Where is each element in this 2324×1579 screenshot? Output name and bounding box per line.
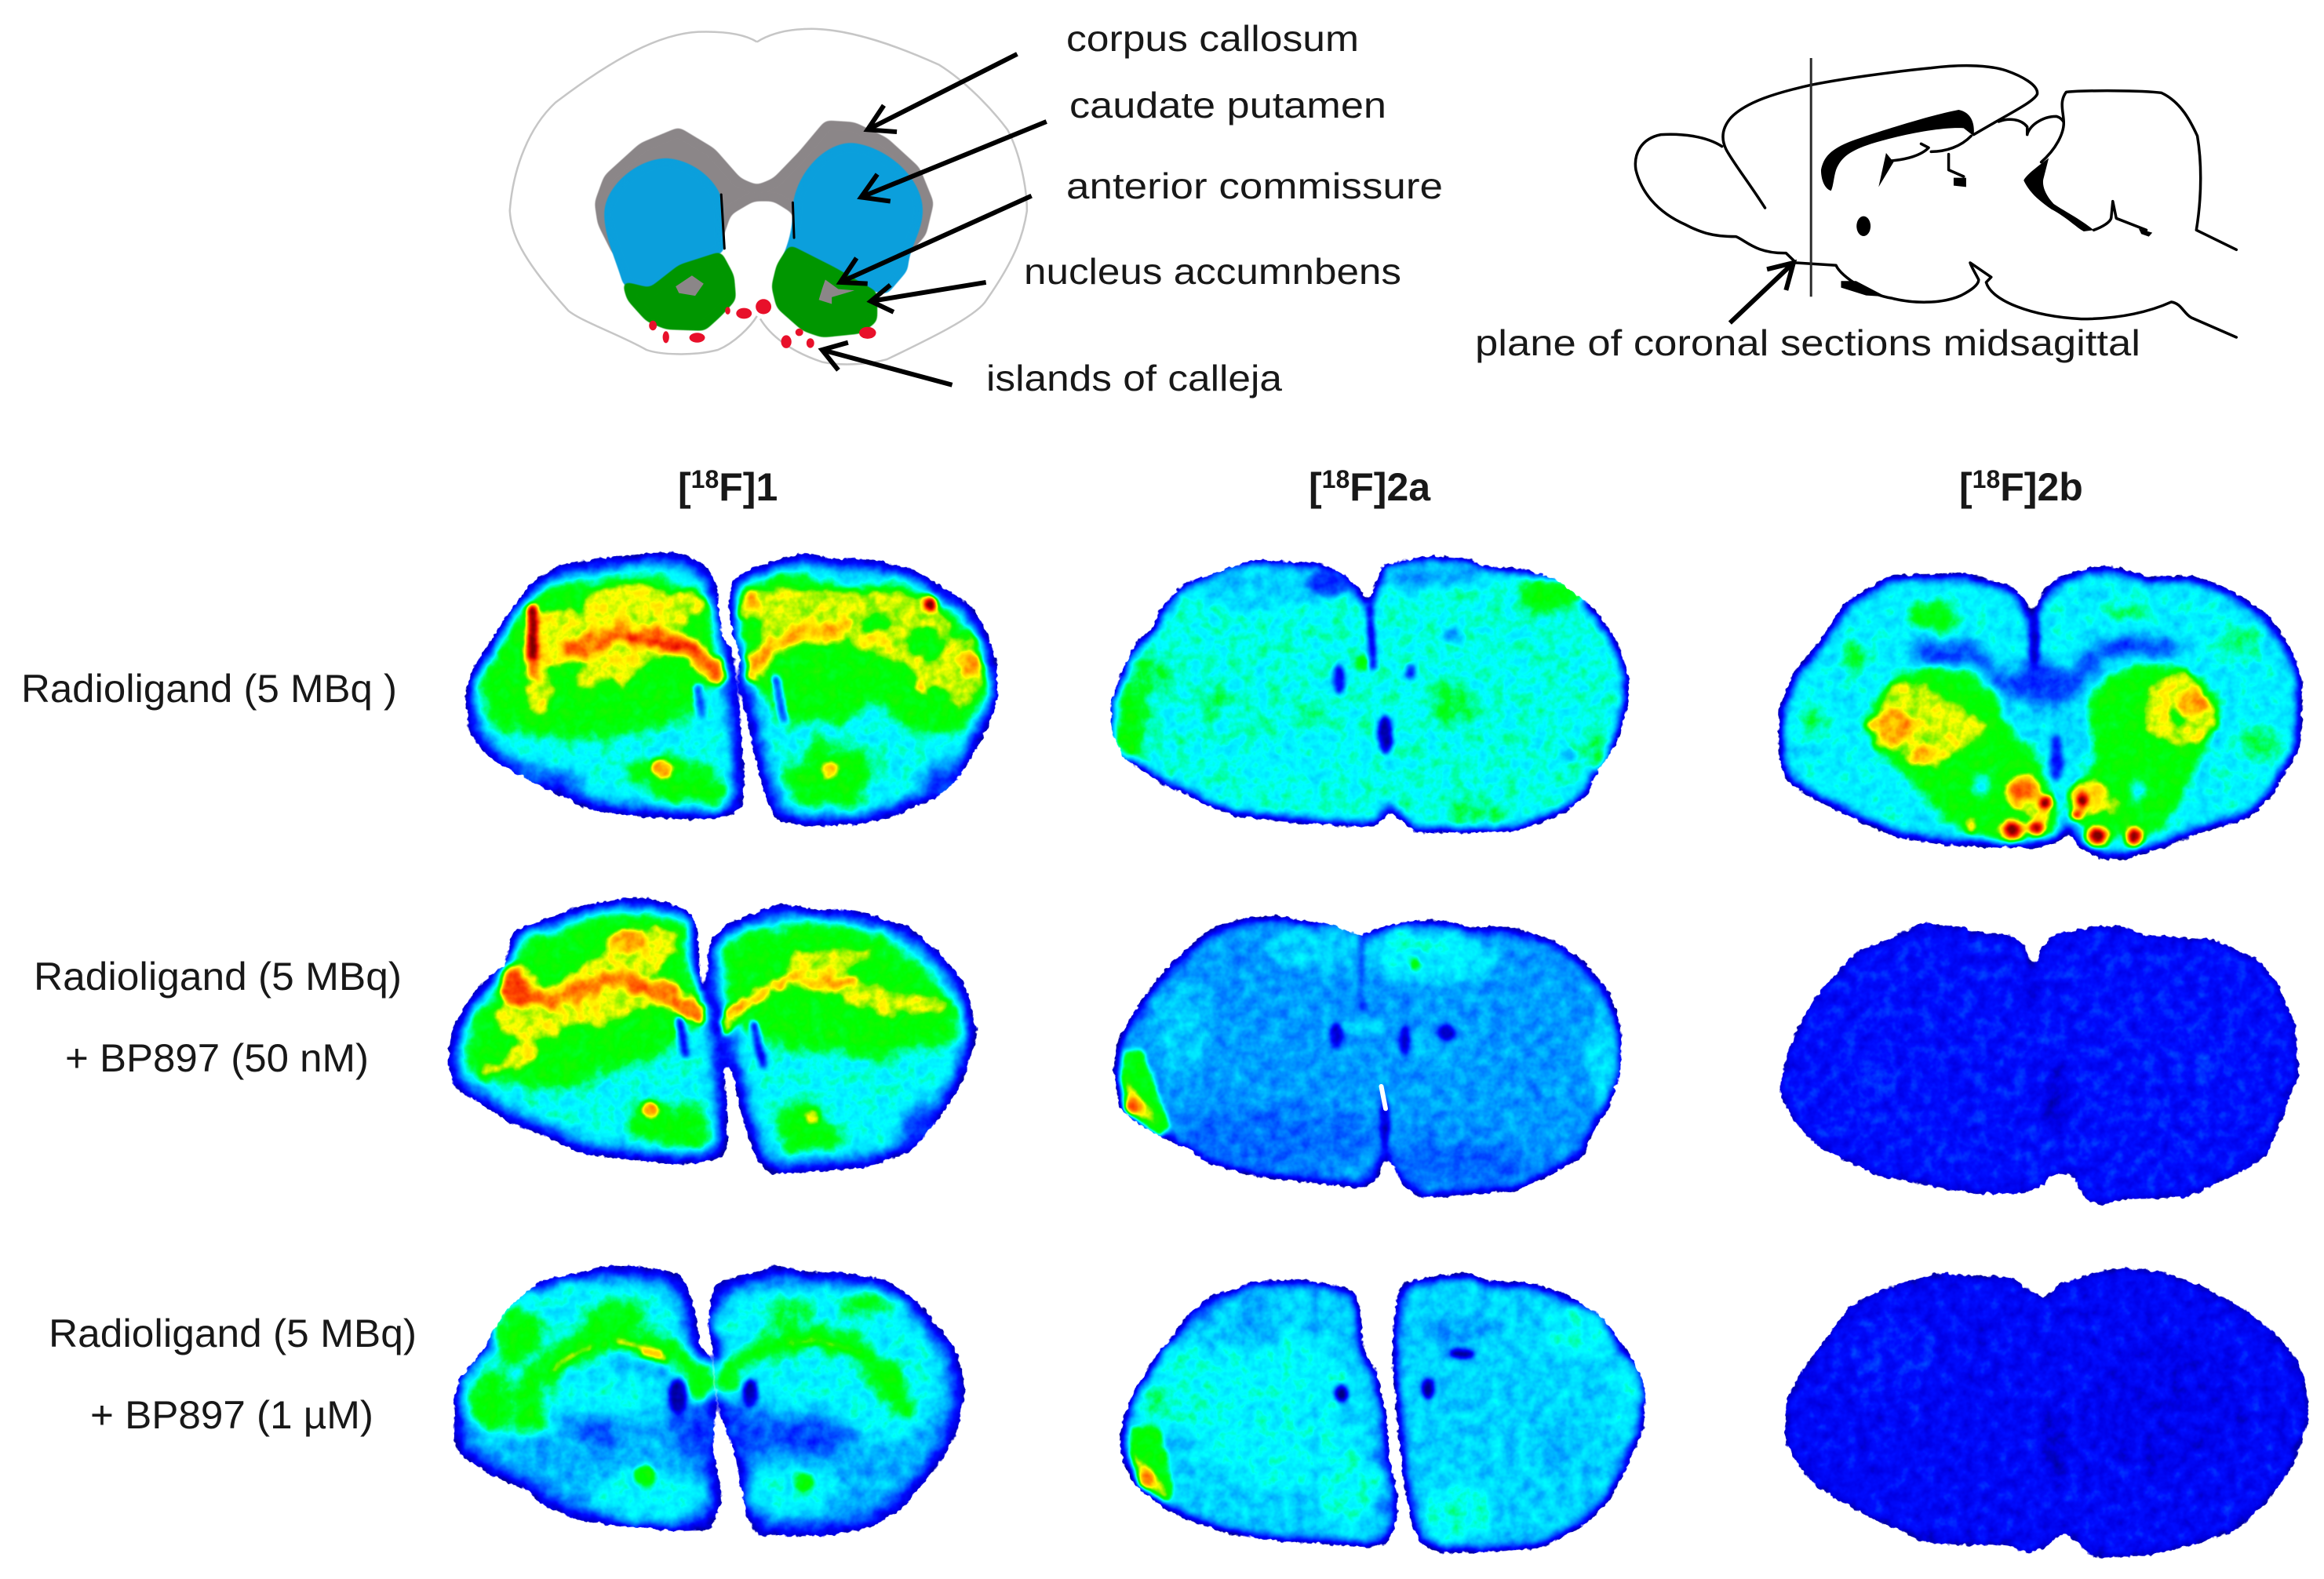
plane of section line <box>1810 58 1812 297</box>
column heading: [18F]2b: 18 <box>1972 465 2000 493</box>
label: caudate putamen: caudate putamen <box>1069 85 1386 126</box>
arrow: anterior commissure <box>840 196 1032 284</box>
label: islands of calleja: islands of calleja <box>986 358 1282 398</box>
label: corpus callosum: corpus callosum <box>1066 18 1359 59</box>
label: nucleus accumnbens: nucleus accumnbens <box>1024 251 1401 292</box>
column heading: [18F]2a: F]2a <box>1350 465 1431 509</box>
heatmap: [18F]2b radioligand <box>1776 565 2304 861</box>
ventricle edges <box>721 195 794 249</box>
anterior commissure regions <box>676 275 854 304</box>
arrow: caudate putamen <box>861 122 1047 202</box>
heatmap: [18F]2a radioligand <box>1109 554 1630 835</box>
nucleus accumbens regions <box>621 245 877 338</box>
heatmap: [18F]1 with BP897 50 nM <box>447 897 978 1175</box>
arrow: plane of coronal sections <box>1730 263 1794 323</box>
row label: radioligand 5 MBq: Radioligand (5 MBq ) <box>21 667 397 711</box>
caudate putamen regions <box>604 143 923 294</box>
heatmap: [18F]2a with BP897 1 µM <box>1119 1272 1646 1555</box>
column heading: [18F]1: F]1 <box>719 465 778 509</box>
row label: radioligand plus BP897 50 nM <box>34 955 402 1080</box>
column heading: [18F]2b: [ <box>1959 465 1972 509</box>
heatmap: [18F]2b with BP897 1 µM <box>1784 1266 2309 1559</box>
column heading: [18F]2a: [ <box>1309 465 1322 509</box>
heatmap: [18F]1 radioligand <box>464 551 999 828</box>
column heading: [18F]2a: 18 <box>1322 465 1350 493</box>
arrow: nucleus accumbens <box>871 282 986 312</box>
row label: radioligand plus BP897 1 uM <box>49 1312 417 1437</box>
corpus callosum region <box>595 120 934 256</box>
heatmap: [18F]2b with BP897 50 nM <box>1779 921 2300 1206</box>
column heading: [18F]2b: F]2b <box>2000 465 2083 509</box>
label: anterior commissure: anterior commissure <box>1066 166 1443 206</box>
column heading: [18F]1: 18 <box>691 465 719 493</box>
coronal section outline <box>510 29 1027 364</box>
row label: radioligand plus BP897 1 uM: Radioligand (5 MBq) <box>49 1312 417 1355</box>
heatmap: [18F]1 with BP897 1 µM <box>454 1264 966 1537</box>
white slit in section <box>1381 1086 1386 1108</box>
sagittal outlines <box>1635 66 2236 337</box>
arrow: corpus callosum <box>868 54 1017 132</box>
panel: coronal brain atlas diagram <box>510 18 1443 398</box>
islands of calleja dots <box>649 299 876 348</box>
panel: midsagittal brain sketch <box>1475 58 2236 363</box>
row label: radioligand plus BP897 1 uM: + BP897 (1 µM) <box>90 1393 373 1437</box>
heatmap: [18F]2a with BP897 50 nM <box>1112 914 1623 1199</box>
column heading: [18F]1: [ <box>678 465 691 509</box>
row label: radioligand plus BP897 50 nM: + BP897 (50 nM) <box>65 1036 369 1080</box>
label: plane of coronal sections: plane of coronal sections midsagittal <box>1475 322 2140 363</box>
row label: radioligand plus BP897 50 nM: Radioligand (5 MBq) <box>34 955 402 999</box>
arrow: islands of calleja <box>822 343 953 385</box>
